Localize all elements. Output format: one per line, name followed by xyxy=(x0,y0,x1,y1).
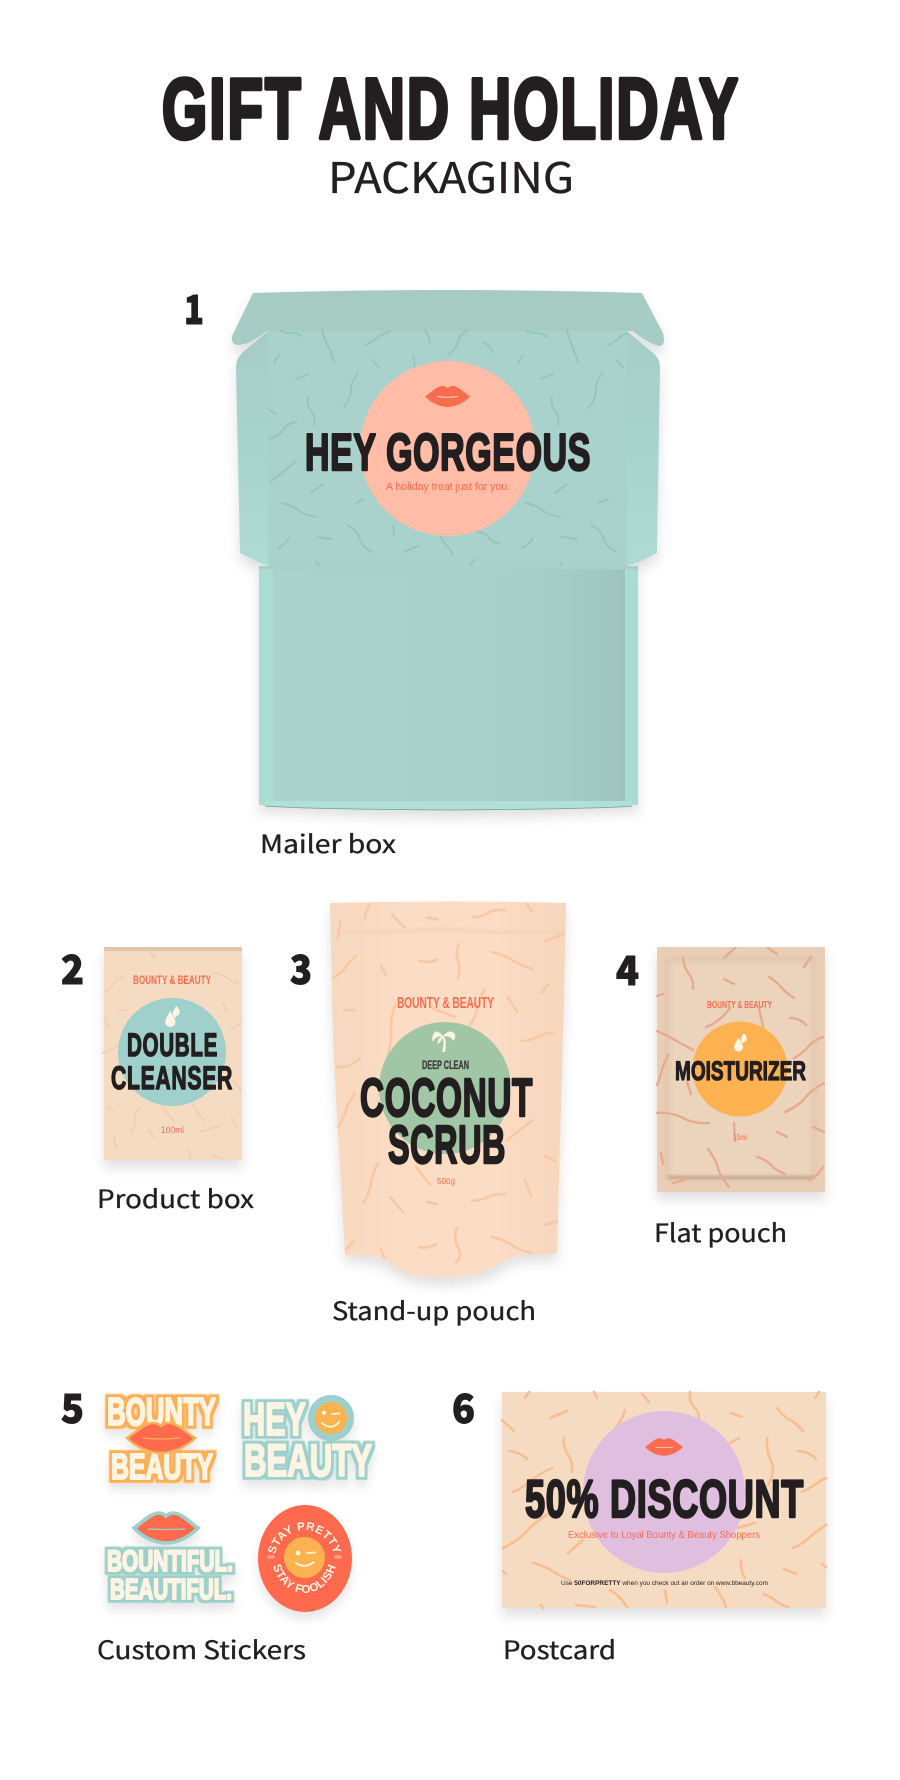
custom stickers xyxy=(102,1391,376,1621)
DOUBLE CLEANSER: DOUBLE xyxy=(127,1027,218,1063)
mailer lid squiggle pattern xyxy=(268,330,627,566)
drops icon xyxy=(165,1006,180,1027)
postcard pattern xyxy=(502,1392,826,1608)
sticker: bounty beauty: BEAUTY xyxy=(111,1446,213,1487)
MOISTURIZER: MOISTURIZER xyxy=(675,1056,806,1086)
lilac circle xyxy=(583,1411,745,1573)
DOUBLE CLEANSER: CLEANSER xyxy=(111,1060,233,1096)
mailer box lid flaps and back xyxy=(232,290,664,810)
sticker: bounty beauty: BOUNTY xyxy=(107,1391,216,1434)
teal circle xyxy=(118,998,226,1106)
postcard lips icon xyxy=(645,1438,683,1456)
title xyxy=(162,62,740,206)
label stand-up pouch: Stand-up pouch xyxy=(332,1292,536,1328)
sticker: stay pretty stay foolish: STAY PRETTY xyxy=(268,1522,342,1554)
DOUBLE CLEANSER xyxy=(111,1027,233,1096)
mailer box top fold xyxy=(257,291,640,331)
sticker: stay pretty stay foolish: STAY FOOLISH xyxy=(274,1564,336,1593)
product box xyxy=(103,947,242,1160)
postcard background xyxy=(502,1392,826,1608)
number 2: 2 xyxy=(61,938,84,996)
stand-up pouch body xyxy=(330,902,566,1277)
product box size: 100ml xyxy=(161,1125,184,1135)
postcard subtitle: Exclusive to Loyal Bounty & Beauty Shoppers xyxy=(568,1529,760,1541)
label mailer box: Mailer box xyxy=(260,825,397,861)
flat pouch inner seal xyxy=(668,960,813,1179)
number 3: 3 xyxy=(290,938,312,996)
COCONUT SCRUB xyxy=(360,1068,533,1175)
flat pouch pattern xyxy=(657,948,824,1187)
number 5: 5 xyxy=(61,1377,84,1435)
COCONUT SCRUB: SCRUB xyxy=(388,1115,506,1175)
deep clean: DEEP CLEAN xyxy=(422,1058,469,1072)
palm tree icon xyxy=(432,1032,455,1052)
sticker: bountiful beautiful: BOUNTIFUL. xyxy=(107,1545,233,1578)
flat pouch brand: BOUNTY & BEAUTY xyxy=(707,1000,772,1011)
sticker: hey beauty xyxy=(243,1393,372,1486)
sticker: hey beauty: BEAUTY xyxy=(244,1435,372,1486)
label flat pouch: Flat pouch xyxy=(654,1214,787,1250)
sticker: bountiful beautiful xyxy=(107,1513,233,1606)
label product box: Product box xyxy=(97,1180,255,1216)
pouch brand: BOUNTY & BEAUTY xyxy=(397,995,494,1012)
flat pouch xyxy=(657,947,825,1192)
sticker: stay pretty stay foolish xyxy=(256,1505,354,1621)
mailer box inner lid panel xyxy=(268,330,627,566)
green circle xyxy=(379,1022,511,1154)
flat pouch body xyxy=(657,947,825,1192)
HEY GORGEOUS: HEY GORGEOUS xyxy=(305,424,591,482)
lips icon xyxy=(425,386,470,407)
product box body xyxy=(104,947,242,1160)
flat pouch drops icon xyxy=(734,1033,747,1052)
COCONUT SCRUB: COCONUT xyxy=(360,1068,533,1128)
pouch seal line xyxy=(333,928,564,933)
number 1: 1 xyxy=(184,278,204,336)
label custom stickers: Custom Stickers xyxy=(97,1631,306,1667)
number 4: 4 xyxy=(616,939,639,997)
mailer subtitle: A holiday treat just for you. xyxy=(386,481,510,493)
peach circle xyxy=(360,361,535,536)
stand-up pouch xyxy=(330,902,566,1277)
product box brand: BOUNTY & BEAUTY xyxy=(133,973,211,987)
product box pattern xyxy=(103,952,241,1159)
flat pouch size: 15ml xyxy=(733,1133,747,1142)
sticker: bounty beauty xyxy=(107,1391,216,1487)
mailer box xyxy=(232,290,664,810)
label postcard: Postcard xyxy=(503,1631,616,1667)
pouch size: 500g xyxy=(437,1177,455,1186)
stand-up pouch pattern xyxy=(333,904,564,1262)
postcard xyxy=(502,1392,826,1608)
postcard code line: Use 50FORPRETTY when you check out an order on www.bbeauty.com xyxy=(561,1580,768,1587)
mailer box lower tray xyxy=(259,566,638,810)
product box top flap xyxy=(104,947,242,951)
sticker: hey beauty: HEY xyxy=(243,1393,306,1445)
sticker: bountiful beautiful: BEAUTIFUL. xyxy=(110,1574,232,1606)
number 6: 6 xyxy=(452,1377,475,1435)
title: PACKAGING xyxy=(328,145,574,206)
orange circle xyxy=(692,1022,788,1116)
